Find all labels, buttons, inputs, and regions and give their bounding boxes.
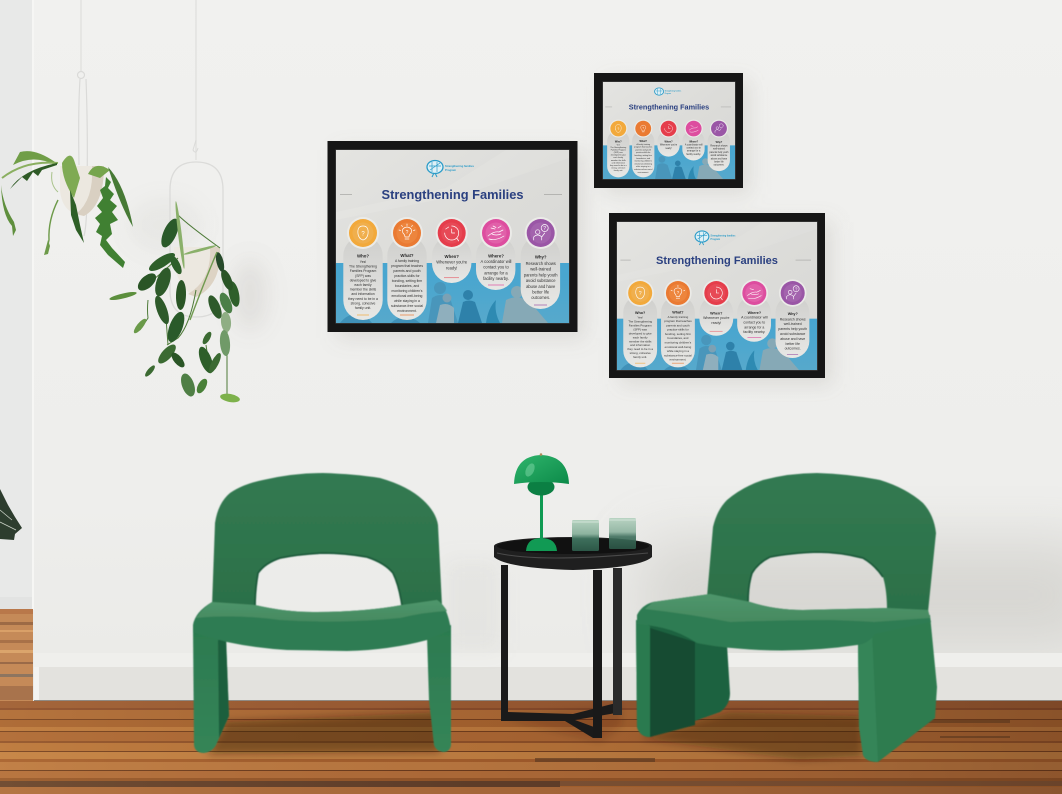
column: who: ? <box>361 232 365 238</box>
plant 1: hanging cactus <box>1 0 133 268</box>
column: why: well-trained <box>784 322 802 326</box>
column: why: abuse and have <box>526 284 556 289</box>
logo: Strengthening families <box>711 235 736 238</box>
column: what: program that teaches <box>391 264 423 268</box>
column: where <box>476 217 515 290</box>
column: why <box>776 279 809 358</box>
column: who: they need to be in a <box>348 297 378 301</box>
logo: Strengthening families <box>445 164 474 168</box>
logo: Program <box>711 239 720 241</box>
poster: small top right <box>603 82 735 179</box>
column: what <box>387 217 427 320</box>
column: what: monitoring children's <box>665 340 692 344</box>
column: who: family unit. <box>614 169 623 172</box>
poster: large left <box>336 150 569 323</box>
column: why: avoid substance <box>711 154 728 157</box>
poster frame: large left <box>328 141 578 332</box>
column: where: Where? <box>748 311 762 315</box>
green table lamp <box>514 453 569 551</box>
column: when: ready! <box>665 147 672 150</box>
column: what: boundaries, and <box>395 284 419 288</box>
column: where: facility nearby. <box>743 330 765 334</box>
column: why: avoid substance <box>780 332 805 336</box>
column: why: ? <box>543 226 546 232</box>
column: who: developed to give <box>611 154 626 157</box>
column: why: Research shows <box>710 144 728 147</box>
logo: Program <box>445 168 457 172</box>
poster: medium right <box>617 222 817 370</box>
column: what: while staying in a <box>394 299 420 303</box>
column: when: ready! <box>446 266 457 270</box>
column: who: each family <box>613 157 623 159</box>
logo <box>655 88 681 95</box>
column: what: A family training <box>636 143 650 146</box>
wooden floor <box>0 609 1062 794</box>
column: what: A family training <box>668 315 689 319</box>
column: who: member the skills <box>629 339 652 343</box>
logo: Program <box>665 93 672 95</box>
column: where <box>737 279 771 342</box>
column: when: When? <box>445 254 459 259</box>
wall shading <box>640 540 1062 650</box>
column: why: Research shows <box>526 261 556 266</box>
column: why: ? <box>795 286 798 291</box>
column: who: Yes! <box>360 260 366 264</box>
column: who: ? <box>617 127 619 131</box>
green glasses <box>572 518 636 551</box>
column: what: while staying in a <box>667 349 689 353</box>
family silhouettes <box>620 335 799 370</box>
heading: Strengthening Families <box>656 255 778 267</box>
column: what: bonding, setting firm <box>635 154 652 157</box>
column: where: A coordinator will <box>741 316 768 320</box>
column: why: Why? <box>716 141 723 144</box>
column: what: program that teaches <box>634 146 652 149</box>
skirting board <box>34 653 1062 701</box>
column: what: boundaries, and <box>667 336 689 340</box>
column: what: bonding, setting firm <box>665 332 692 336</box>
left recess wall <box>0 0 34 610</box>
side table <box>494 537 652 738</box>
plant 3: leaf at left edge <box>0 489 22 540</box>
column: when: ready! <box>711 321 721 325</box>
column: why: parents help youth <box>778 327 807 331</box>
column: why: parents help youth <box>524 272 558 277</box>
column: what: program that teaches <box>664 319 692 323</box>
column: who: (SFP) was <box>633 327 648 331</box>
logo: Strengthening families <box>665 90 681 93</box>
column: who: and information <box>612 161 625 164</box>
column: who: The Strengthening <box>610 146 626 149</box>
column: what: ? <box>406 230 409 236</box>
column: why: better life <box>532 290 550 294</box>
column: who: The Strengthening <box>628 320 653 324</box>
plant 2: hanging leafy plant in hoop <box>109 0 242 404</box>
logo <box>695 231 736 245</box>
column: what: practice-skills for <box>394 274 420 278</box>
column: who: Families Program <box>350 269 376 273</box>
column: where: Where? <box>488 254 504 258</box>
column: why: better life <box>714 160 724 163</box>
logo <box>427 160 474 177</box>
column: what: What? <box>672 311 684 315</box>
column: why: parents help youth <box>709 151 729 154</box>
column: where: A coordinator will <box>685 143 703 146</box>
poster frame: medium right <box>609 213 825 378</box>
column: who: developed to give <box>629 331 652 335</box>
column: why: outcomes. <box>531 295 550 300</box>
column: why: Research shows <box>780 317 806 321</box>
column: what: bonding, setting firm <box>392 279 422 283</box>
column: who: Who? <box>357 254 369 258</box>
column: what: A family training <box>395 259 419 263</box>
column: who: Who? <box>635 311 646 315</box>
column: what: substance-free social <box>634 168 653 171</box>
column: who: ? <box>639 291 642 297</box>
column: where: arrange for a <box>744 325 764 329</box>
column: who: Yes! <box>616 144 621 146</box>
column: what: practice-skills for <box>667 328 689 332</box>
column: when <box>699 279 733 336</box>
column: where: contact you to <box>686 147 702 150</box>
column: where: contact you to <box>483 265 509 270</box>
column: where: facility nearby. <box>483 276 509 281</box>
column: when: When? <box>665 141 673 144</box>
column: why: abuse and have <box>711 158 728 160</box>
column: why: Why? <box>535 254 547 260</box>
column: what: emotional well-being <box>392 294 423 298</box>
column: why: avoid substance <box>526 278 556 283</box>
column: who <box>607 120 629 177</box>
column: what: environment. <box>397 309 417 313</box>
column: who: member the skills <box>350 288 376 292</box>
column: where: arrange for a <box>687 150 701 153</box>
column: why <box>708 120 730 171</box>
column: who: Families Program <box>611 150 626 152</box>
column: where: arrange for a <box>484 270 508 275</box>
column: what: ? <box>642 126 644 130</box>
column: what: parents and youth <box>636 148 651 151</box>
column: who: and information <box>630 343 651 347</box>
column: who: Families Program <box>629 324 652 328</box>
column: who: developed to give <box>350 278 376 282</box>
column: what: monitoring children's <box>392 289 423 293</box>
blue band <box>336 263 569 323</box>
column: what: practice-skills for <box>636 151 651 154</box>
column: when <box>657 120 680 157</box>
right green chair <box>636 473 937 762</box>
column: who: (SFP) was <box>355 274 371 278</box>
column: what: What? <box>640 140 647 143</box>
family silhouettes <box>340 282 548 323</box>
column: who: each family <box>354 283 372 287</box>
column: who: each family <box>633 335 648 339</box>
column: who: and information <box>351 292 375 296</box>
column: who: strong, cohesive <box>630 351 651 355</box>
blue band <box>603 145 735 179</box>
heading: Strengthening Families <box>629 103 709 111</box>
column: why: well-trained <box>530 267 552 272</box>
column: what: emotional well-being <box>665 345 692 349</box>
column: who <box>623 279 657 367</box>
column: why <box>521 217 560 309</box>
column: what: boundaries, and <box>636 158 650 160</box>
column: who: family unit. <box>633 355 647 359</box>
column: what: parents and youth <box>666 323 690 327</box>
column: where: A coordinator will <box>481 259 512 264</box>
column: why: outcomes. <box>714 164 725 167</box>
column: where: facility nearby. <box>686 153 701 156</box>
column: why: better life <box>785 342 800 346</box>
column: who: they need to be in a <box>627 347 653 351</box>
column: why: Why? <box>788 312 798 316</box>
column: what <box>661 279 695 367</box>
column: what: ? <box>677 290 680 295</box>
column: when <box>432 217 471 283</box>
column: why: well-trained <box>713 148 726 151</box>
poster frame: small top right <box>594 73 743 188</box>
column: who: they need to be in a <box>610 164 628 167</box>
column: what: parents and youth <box>393 269 421 273</box>
family silhouettes <box>655 156 723 179</box>
column: who: strong, cohesive <box>351 301 375 305</box>
column: what: environment. <box>638 171 649 174</box>
column: what <box>632 120 654 177</box>
column: who: (SFP) was <box>614 152 623 154</box>
column: when: Whenever you're <box>660 144 678 147</box>
column: who: The Strengthening <box>349 265 377 269</box>
column: where: Where? <box>689 140 699 143</box>
column: why: outcomes. <box>785 347 801 351</box>
column: when: When? <box>710 311 723 315</box>
column: what: What? <box>400 253 414 258</box>
column: who <box>343 217 383 320</box>
floor shadows <box>208 706 862 760</box>
column: who: family unit. <box>355 306 371 310</box>
blue band <box>617 319 817 370</box>
column: what: monitoring children's <box>634 160 652 163</box>
column: where <box>682 120 705 160</box>
heading: Strengthening Families <box>382 187 524 202</box>
column: what: environment. <box>670 358 687 362</box>
column: when: Whenever you're <box>436 260 468 264</box>
column: who: Yes! <box>637 316 643 320</box>
column: what: substance-free social <box>391 304 423 308</box>
left green chair <box>193 473 451 753</box>
column: who: Who? <box>615 140 622 143</box>
column: what: while staying in a <box>636 165 651 168</box>
wall shadows <box>129 80 832 650</box>
column: who: member the skills <box>611 159 626 162</box>
column: when: Whenever you're <box>703 316 730 320</box>
column: where: contact you to <box>743 321 765 325</box>
column: what: substance-free social <box>664 353 692 357</box>
column: why: abuse and have <box>780 337 805 341</box>
column: what: emotional well-being <box>634 162 652 165</box>
column: who: strong, cohesive <box>611 167 625 170</box>
